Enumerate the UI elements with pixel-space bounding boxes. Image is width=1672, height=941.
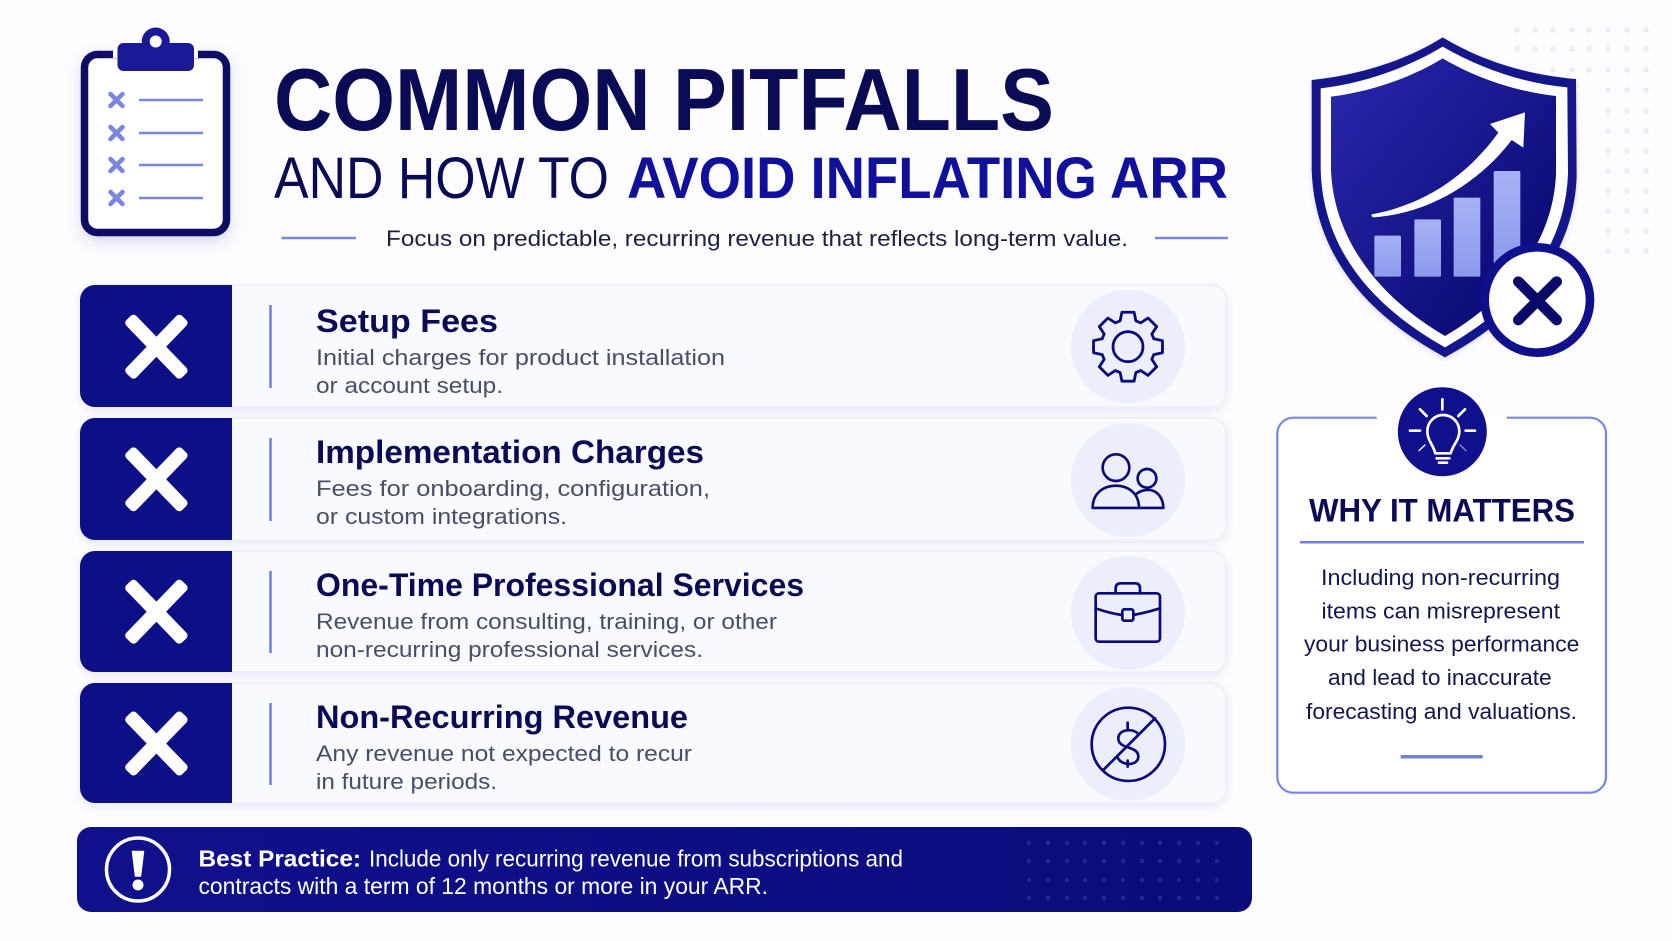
title: COMMON PITFALLS <box>274 50 1054 149</box>
icon: shield with growth chart and x badge <box>1312 37 1590 357</box>
title <box>274 50 1228 211</box>
panel: one-time professional services: One-Time Professional Services <box>316 567 804 603</box>
icon: exclamation <box>106 838 170 901</box>
panel: one-time professional services: Revenue from consulting, training, or other <box>316 609 777 634</box>
text block: why it matters body: Including non-recurring <box>1321 565 1560 590</box>
title: AND HOW TO <box>274 146 609 211</box>
decorative dot grid, top right <box>1514 27 1649 254</box>
panel: implementation charges: or custom integrations. <box>316 504 567 529</box>
text block: why it matters body: and lead to inaccurate <box>1328 665 1552 690</box>
callout: best practice banner <box>77 827 1252 912</box>
icon: briefcase <box>1096 583 1160 642</box>
subtitle with side rules: Focus on predictable, recurring revenue that reflects long-term value. <box>386 226 1128 251</box>
panel: setup fees: or account setup. <box>316 373 503 398</box>
panel: non-recurring revenue: Any revenue not expected to recur <box>316 741 692 766</box>
panel: non-recurring revenue <box>80 683 1226 803</box>
panel: setup fees: Setup Fees <box>316 303 498 339</box>
panel: non-recurring revenue: in future periods. <box>316 769 497 794</box>
text block: why it matters body <box>1304 565 1579 724</box>
panel: implementation charges: Fees for onboarding, configuration, <box>316 476 710 501</box>
icon: lightbulb <box>1398 387 1487 476</box>
callout: best practice banner: Best Practice: <box>198 846 361 872</box>
callout: best practice banner: Include only recurring revenue from subscriptions and <box>369 846 903 872</box>
icon: no dollar <box>1092 708 1165 781</box>
icon: people <box>1093 454 1163 508</box>
panel: one-time professional services: non-recurring professional services. <box>316 637 703 662</box>
icon: x badge <box>1485 247 1590 353</box>
icon: gear <box>1094 312 1162 381</box>
icon: clipboard checklist <box>84 28 226 232</box>
title: AVOID INFLATING ARR <box>627 146 1228 211</box>
panel: one-time professional services <box>80 551 1226 672</box>
panel: setup fees: Initial charges for product installation <box>316 345 725 370</box>
text block: why it matters body: items can misrepresent <box>1322 598 1560 623</box>
arrow: growth trend <box>1371 112 1525 217</box>
panel: implementation charges <box>80 418 1226 540</box>
panel: why it matters <box>1277 387 1606 793</box>
callout: best practice banner: contracts with a term of 12 months or more in your ARR. <box>198 873 768 899</box>
panel: implementation charges: Implementation Charges <box>316 434 704 470</box>
panel: non-recurring revenue: Non-Recurring Revenue <box>316 699 688 735</box>
panel: setup fees <box>80 285 1226 407</box>
heading: why it matters: WHY IT MATTERS <box>1309 493 1575 529</box>
text block: why it matters body: forecasting and valuations. <box>1306 699 1577 724</box>
bar chart <box>1374 171 1520 277</box>
text block: why it matters body: your business performance <box>1304 632 1579 657</box>
